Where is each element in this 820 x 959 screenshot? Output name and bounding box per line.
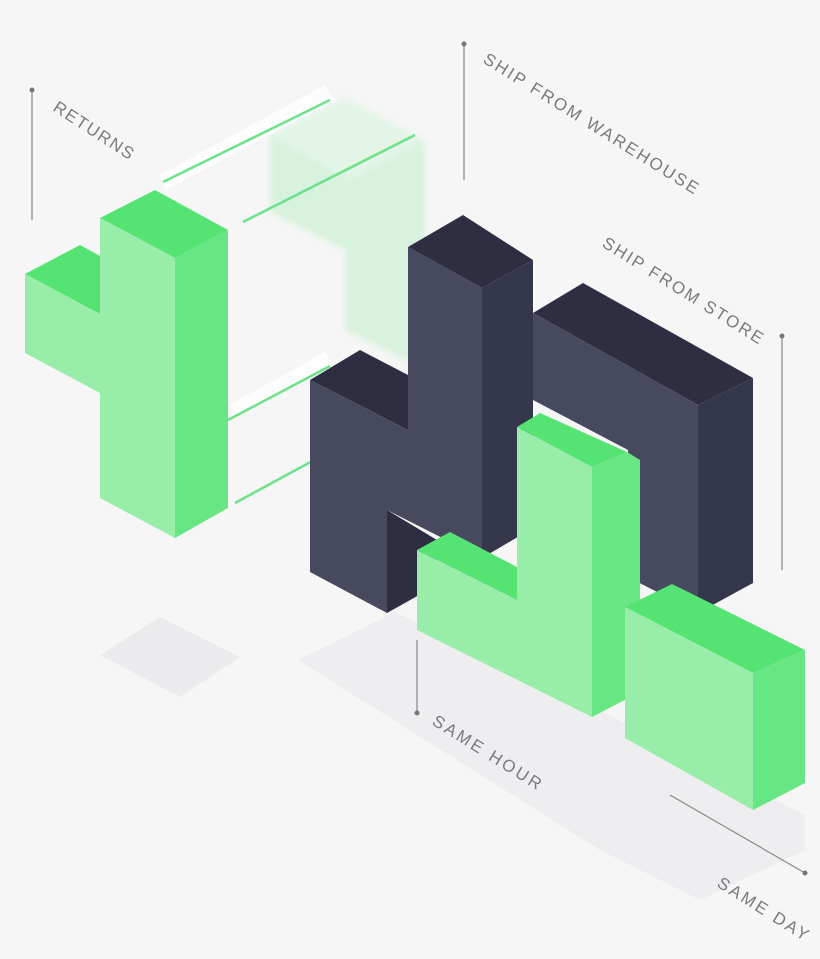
label: ship from store: SHIP FROM STORE: [599, 233, 767, 348]
label: ship from warehouse: SHIP FROM WAREHOUSE: [480, 49, 702, 198]
label: same hour: SAME HOUR: [429, 711, 545, 794]
label: ship from store: [599, 233, 784, 570]
label: same day: SAME DAY: [714, 873, 812, 945]
ghost shape: [270, 97, 425, 370]
shadow: left floor: [100, 617, 240, 697]
guide lines: [160, 85, 415, 503]
dark block: ship from store: [533, 283, 753, 613]
label: same hour: [414, 640, 545, 794]
green block: returns: [25, 190, 228, 538]
green block: same hour: [417, 413, 640, 717]
label: returns: [30, 88, 137, 220]
green block: same day: [625, 584, 805, 810]
dark block: ship from warehouse: [310, 215, 533, 613]
label: returns: RETURNS: [50, 97, 137, 163]
label: same day: [670, 795, 812, 945]
shadow: main floor: [298, 612, 805, 900]
